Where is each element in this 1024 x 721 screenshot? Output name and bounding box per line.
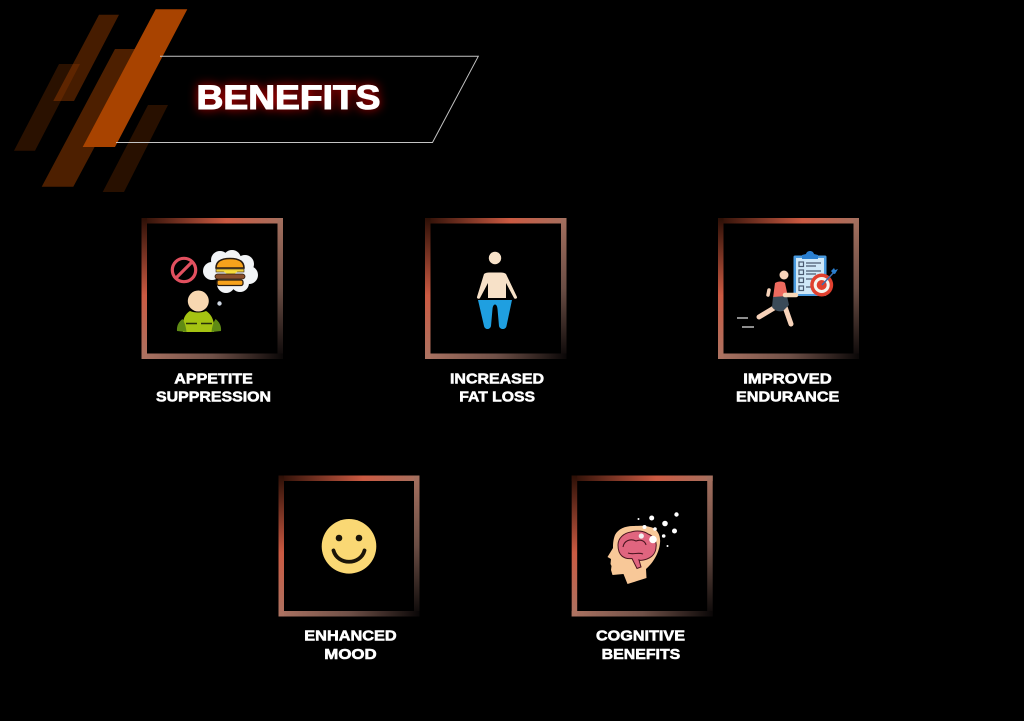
- label: [156, 371, 271, 406]
- panel: increased fat loss: [425, 218, 566, 406]
- panel: enhanced mood: [278, 476, 420, 663]
- label: ENHANCED: [304, 629, 397, 645]
- icon: runner with checklist and target: [737, 251, 838, 327]
- label: MOOD: [324, 647, 377, 663]
- label: [450, 371, 544, 406]
- label: IMPROVED: [743, 371, 832, 387]
- frame: [278, 476, 420, 616]
- label: FAT LOSS: [459, 390, 535, 406]
- title banner outline: [116, 56, 478, 142]
- decorative slanted bars: [14, 9, 187, 192]
- icon: slimmer body: [477, 252, 517, 329]
- frame: [142, 218, 283, 359]
- frame: [718, 218, 859, 359]
- icon: no food thought: [172, 250, 258, 332]
- title: BENEFITS: [196, 79, 380, 117]
- label: COGNITIVE: [596, 629, 685, 645]
- label: [736, 371, 840, 406]
- label: BENEFITS: [602, 647, 681, 663]
- label: SUPPRESSION: [156, 390, 271, 406]
- title: BENEFITS: [196, 79, 380, 117]
- frame: [572, 476, 713, 616]
- label: [304, 629, 397, 663]
- label: INCREASED: [450, 371, 544, 387]
- panel: appetite suppression: [142, 218, 283, 406]
- frame: [425, 218, 566, 359]
- label: APPETITE: [174, 371, 253, 387]
- label: ENDURANCE: [736, 390, 840, 406]
- icon: smiley: [322, 519, 376, 574]
- label: [596, 629, 685, 663]
- panel: improved endurance: [718, 218, 859, 406]
- icon: head with brain: [608, 512, 679, 584]
- panel: cognitive benefits: [572, 476, 713, 663]
